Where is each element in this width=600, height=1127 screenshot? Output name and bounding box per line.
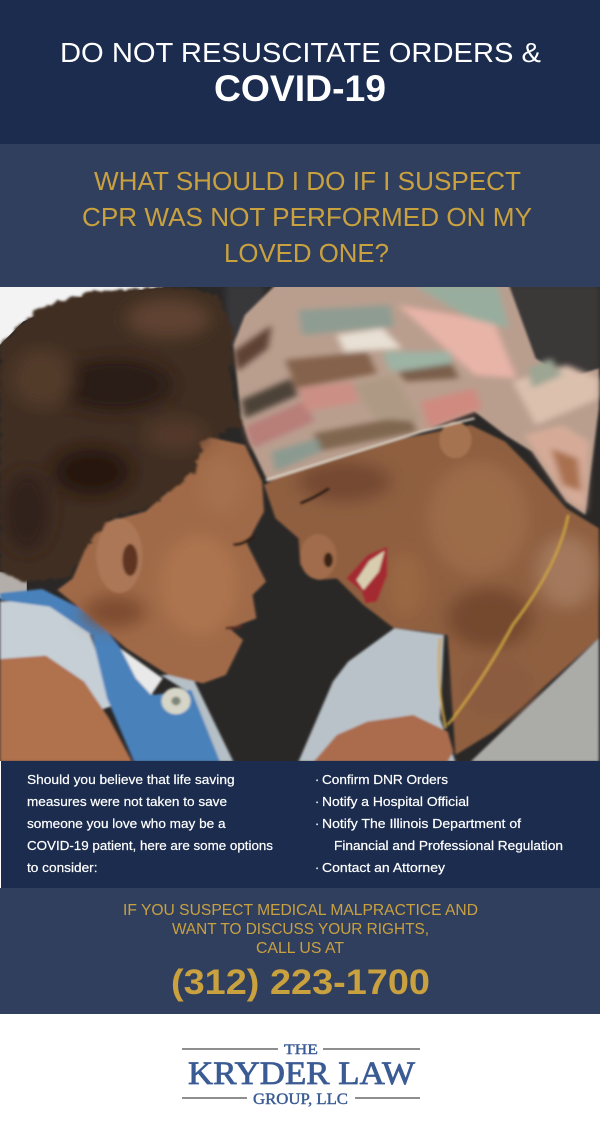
title line 2: COVID-19 bbox=[214, 68, 386, 109]
phone number: (312) 223-1700 bbox=[171, 963, 430, 1002]
options list: Contact an Attorney bbox=[322, 861, 446, 875]
panel: options text bbox=[0, 761, 600, 888]
logo: The Kryder Law Group, LLC: KRYDER LAW bbox=[188, 1056, 416, 1092]
intro paragraph: measures were not taken to save bbox=[27, 795, 227, 809]
question line 3: LOVED ONE? bbox=[224, 238, 389, 268]
scarf bbox=[233, 285, 599, 515]
hair shading bbox=[4, 298, 210, 552]
woman's ear bbox=[439, 422, 471, 458]
nose bbox=[300, 534, 337, 579]
options list: Notify The Illinois Department of bbox=[322, 817, 522, 831]
scarf pattern bbox=[233, 285, 599, 512]
necklace bbox=[439, 515, 568, 728]
call to action text: IF YOU SUSPECT MEDICAL MALPRACTICE AND bbox=[123, 902, 478, 919]
overall button bbox=[161, 688, 191, 714]
logo: The Kryder Law Group, LLC: GROUP, LLC bbox=[253, 1091, 348, 1108]
woman's eye bbox=[300, 488, 329, 503]
question line 2: CPR WAS NOT PERFORMED ON MY bbox=[82, 202, 532, 232]
options list: Confirm DNR Orders bbox=[322, 773, 448, 787]
options list: · bbox=[315, 773, 319, 787]
intro paragraph: someone you love who may be a bbox=[27, 817, 226, 831]
logo: The Kryder Law Group, LLC bbox=[182, 1042, 420, 1108]
intro paragraph: to consider: bbox=[27, 861, 98, 875]
question line 1: WHAT SHOULD I DO IF I SUSPECT bbox=[94, 166, 521, 196]
child's clothing bbox=[0, 600, 115, 718]
call to action text: CALL US AT bbox=[256, 940, 344, 957]
intro paragraph: COVID-19 patient, here are some options bbox=[27, 839, 273, 853]
options list: Notify a Hospital Official bbox=[322, 795, 469, 809]
child's hair bbox=[0, 287, 241, 582]
call to action text bbox=[123, 902, 478, 957]
child's ear bbox=[96, 518, 142, 593]
panel: title header bbox=[0, 0, 600, 144]
intro paragraph bbox=[27, 773, 273, 875]
title line 1: DO NOT RESUSCITATE ORDERS & bbox=[60, 37, 541, 68]
woman's smile bbox=[346, 547, 387, 603]
panel: call to action bbox=[0, 888, 600, 1014]
woman's shirt bbox=[298, 628, 455, 762]
options list bbox=[315, 773, 563, 875]
woman's skin bbox=[264, 425, 599, 755]
panel: logo footer bbox=[0, 1014, 600, 1127]
panel: question heading bbox=[0, 144, 600, 287]
options list: Financial and Professional Regulation bbox=[334, 839, 563, 853]
child's face bbox=[57, 435, 266, 683]
options list: · bbox=[315, 861, 319, 875]
logo: The Kryder Law Group, LLC: THE bbox=[284, 1042, 318, 1058]
face shading bbox=[74, 538, 234, 640]
photo: child and grandmother touching foreheads bbox=[0, 287, 600, 761]
call to action text: WANT TO DISCUSS YOUR RIGHTS, bbox=[172, 921, 429, 938]
options list: · bbox=[315, 817, 319, 831]
skin shading bbox=[298, 462, 597, 718]
child's eye and mouth bbox=[233, 536, 253, 544]
options list: · bbox=[315, 795, 319, 809]
child's hand bbox=[314, 715, 453, 762]
intro paragraph: Should you believe that life saving bbox=[27, 773, 235, 787]
